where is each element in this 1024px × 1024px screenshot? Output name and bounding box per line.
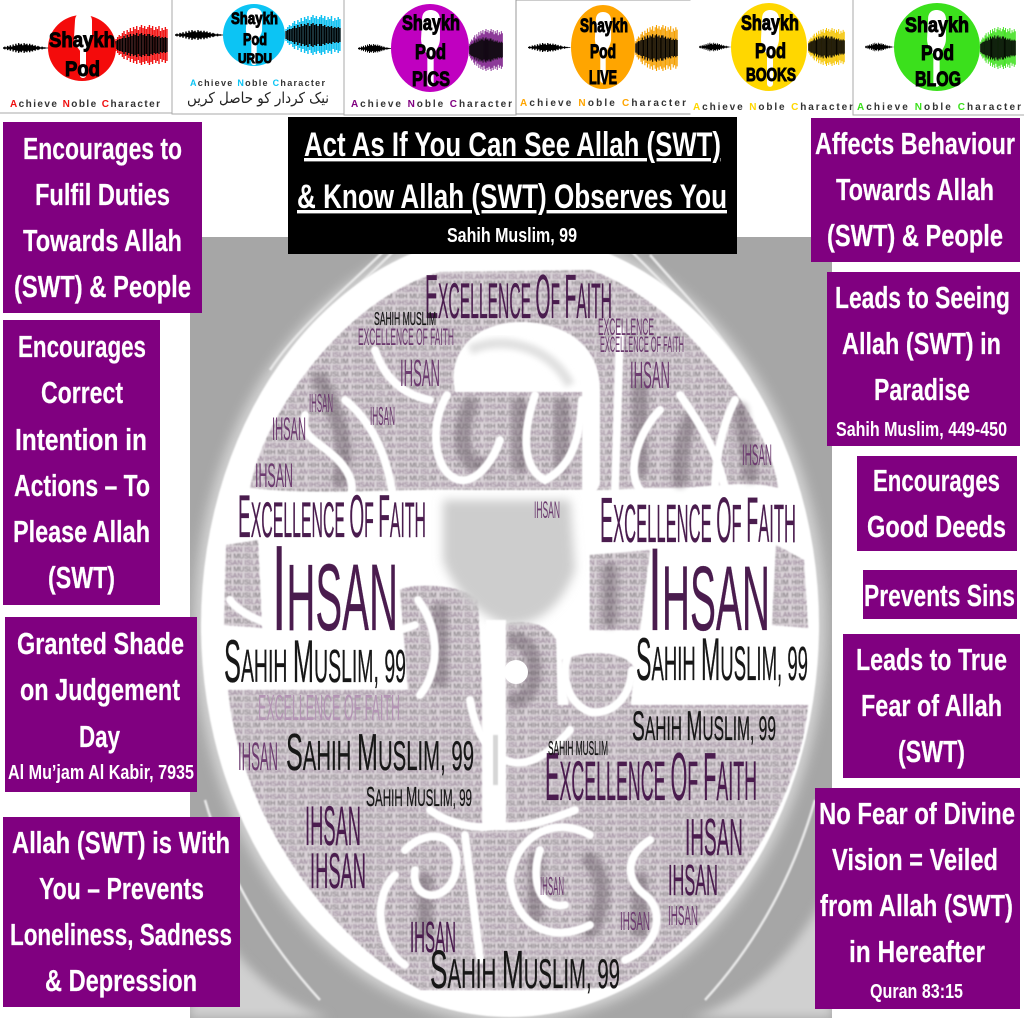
words: Sahih Muslim, 99: SAHIH MUSLIM bbox=[548, 738, 608, 760]
panel: fulfil duties: Towards Allah bbox=[23, 223, 182, 258]
words: Ihsan: IHSAN bbox=[272, 520, 398, 656]
logo tile: Shaykh Pod Urdu: Shaykh bbox=[231, 9, 278, 28]
panel: granted shade: Day bbox=[79, 719, 121, 754]
panel: no fear of divine vision bbox=[815, 788, 1020, 1009]
logo tile: Shaykh Pod Blog: BLOG bbox=[915, 68, 961, 91]
logo tile: Shaykh Pod Live: LIVE bbox=[589, 68, 617, 89]
panel: true fear bbox=[843, 634, 1020, 778]
words: Ihsan: IHSAN bbox=[685, 809, 743, 867]
logo tile: Shaykh Pod Books: Achieve Noble Character bbox=[693, 102, 853, 113]
logo tile: Shaykh Pod Pics: Achieve Noble Character bbox=[351, 99, 512, 110]
words: Ihsan: IHSAN bbox=[668, 900, 698, 931]
panel: true fear: (SWT) bbox=[898, 734, 965, 769]
words: Ihsan: IHSAN bbox=[630, 355, 670, 397]
central word cloud image bbox=[190, 227, 832, 1023]
panel: allah is with you: & Depression bbox=[45, 963, 197, 998]
white letter outlines bbox=[230, 330, 735, 965]
words: Ihsan: IHSAN bbox=[255, 457, 293, 495]
logo tile: Shaykh Pod Books: Pod bbox=[755, 40, 786, 63]
panel: correct intention: Encourages bbox=[18, 329, 146, 364]
words: Excellence of Faith: EXCELLENCE bbox=[598, 314, 654, 341]
panel: no fear of divine vision: Quran 83:15 bbox=[870, 981, 963, 1003]
words: Sahih Muslim, 99: SAHIH MUSLIM, 99 bbox=[286, 724, 474, 782]
panel: title: Sahih Muslim, 99 bbox=[447, 225, 577, 247]
logo strip bbox=[0, 0, 1024, 115]
words: Ihsan: IHSAN bbox=[310, 843, 366, 899]
panel: granted shade bbox=[5, 617, 197, 792]
white microphone bbox=[443, 322, 600, 825]
panel: granted shade: Al Mu’jam Al Kabir, 7935 bbox=[8, 762, 194, 784]
panel: fulfil duties bbox=[3, 122, 202, 313]
logo tile: Shaykh Pod red: Achieve Noble Character bbox=[10, 99, 160, 110]
words: Sahih Muslim, 99: SAHIH MUSLIM, 99 bbox=[636, 626, 808, 693]
panel: correct intention: (SWT) bbox=[48, 560, 115, 595]
panel: granted shade: on Judgement bbox=[20, 672, 180, 707]
panel: seeing allah in paradise bbox=[827, 272, 1020, 446]
panel: allah is with you: Loneliness, Sadness bbox=[10, 917, 232, 952]
panel: good deeds bbox=[857, 456, 1017, 551]
panel: granted shade: Granted Shade bbox=[17, 626, 184, 661]
panel: correct intention bbox=[3, 320, 160, 605]
logo tile: Shaykh Pod Blog: Shaykh bbox=[905, 14, 969, 37]
words: Excellence of Faith: EXCELLENCE OF FAITH bbox=[258, 687, 400, 728]
panel: fulfil duties: (SWT) & People bbox=[14, 269, 191, 304]
central word cloud image: IHSAN bbox=[648, 524, 770, 656]
words: Ihsan: IHSAN bbox=[400, 353, 440, 395]
words: Ihsan: IHSAN bbox=[370, 401, 395, 431]
panel: title: Act As If You Can See Allah (SWT) bbox=[304, 126, 721, 164]
words: Ihsan: IHSAN bbox=[668, 856, 718, 905]
panel: correct intention: Intention in bbox=[15, 422, 147, 457]
words: Excellence of Faith bbox=[238, 263, 796, 815]
logo tile: Shaykh Pod Pics: Shaykh bbox=[402, 12, 460, 35]
words: Ihsan: IHSAN bbox=[540, 871, 564, 901]
words: Ihsan: IHSAN bbox=[534, 497, 560, 524]
logo tile: Shaykh Pod Live bbox=[516, 0, 691, 114]
logo tile: Shaykh Pod Books: Shaykh bbox=[741, 12, 799, 35]
words: Excellence of Faith: EXCELLENCE OF FAITH bbox=[600, 484, 796, 556]
words: Excellence of Faith: EXCELLENCE OF FAITH bbox=[600, 332, 684, 357]
panel: fulfil duties: Fulfil Duties bbox=[35, 177, 170, 212]
words: Excellence of Faith: EXCELLENCE OF FAITH bbox=[425, 263, 612, 332]
panel: prevents sins bbox=[863, 570, 1017, 619]
logo tile: Shaykh Pod Blog: Achieve Noble Character bbox=[857, 102, 1021, 113]
panel: allah is with you: Allah (SWT) is With bbox=[12, 825, 230, 860]
dark blotches in letter bodies bbox=[320, 380, 750, 930]
panel: title: & Know Allah (SWT) Observes You bbox=[297, 178, 727, 216]
panel: no fear of divine vision: in Hereafter bbox=[849, 934, 985, 969]
logo tile: Shaykh Pod Urdu: Achieve Noble Character bbox=[190, 78, 325, 88]
words: Ihsan: IHSAN bbox=[410, 913, 456, 962]
logo tile: Shaykh Pod Urdu: Pod bbox=[243, 30, 267, 49]
words: Ihsan: IHSAN bbox=[238, 735, 278, 779]
words: Sahih Muslim, 99 bbox=[224, 309, 808, 1000]
logo tile: Shaykh Pod red: Pod bbox=[65, 58, 100, 81]
logo tile: Shaykh Pod Pics bbox=[344, 0, 516, 115]
words: Sahih Muslim, 99: SAHIH MUSLIM bbox=[374, 309, 436, 329]
logo tile: Shaykh Pod red bbox=[0, 0, 172, 113]
logo tile: Shaykh Pod Books: BOOKS bbox=[746, 65, 796, 85]
words: Excellence of Faith: EXCELLENCE OF FAITH bbox=[545, 739, 757, 815]
logo tile: Shaykh Pod Blog: Pod bbox=[921, 42, 954, 65]
panel: seeing allah in paradise: Paradise bbox=[874, 372, 970, 407]
words: Ihsan bbox=[238, 353, 772, 962]
words: Ihsan: IHSAN bbox=[309, 388, 333, 418]
panel: title bbox=[288, 117, 737, 254]
words: Sahih Muslim, 99: SAHIH MUSLIM, 99 bbox=[632, 702, 776, 749]
logo tile: Shaykh Pod Urdu: URDU bbox=[238, 50, 272, 66]
panel: affects behaviour bbox=[811, 118, 1020, 262]
logo tile: Shaykh Pod Pics: PICS bbox=[412, 68, 450, 91]
words: Excellence of Faith: EXCELLENCE OF FAITH bbox=[358, 324, 454, 351]
logo tile: Shaykh Pod Pics: Pod bbox=[415, 41, 446, 64]
words: Sahih Muslim, 99: SAHIH MUSLIM, 99 bbox=[430, 940, 620, 1000]
panel: correct intention: Actions – To bbox=[14, 468, 150, 503]
logo tile: Shaykh Pod red: Shaykh bbox=[49, 29, 115, 52]
logo tile: Shaykh Pod Blog bbox=[853, 0, 1024, 115]
panel: fulfil duties: Encourages to bbox=[23, 131, 182, 166]
panel: allah is with you: You – Prevents bbox=[39, 871, 204, 906]
panel: correct intention: Please Allah bbox=[13, 514, 150, 549]
letter shapes: Shaykh Pod Pics bbox=[224, 270, 808, 990]
words: Excellence of Faith: EXCELLENCE OF FAITH bbox=[238, 483, 426, 550]
logo tile: Shaykh Pod Books bbox=[691, 0, 853, 114]
words: Ihsan: IHSAN bbox=[620, 906, 650, 936]
words: Ihsan: IHSAN bbox=[305, 794, 361, 857]
panel: allah is with you bbox=[3, 817, 240, 1007]
logo tile: Shaykh Pod Urdu bbox=[172, 0, 344, 114]
words: Sahih Muslim, 99: SAHIH MUSLIM, 99 bbox=[224, 628, 406, 695]
logo tile: Shaykh Pod Urdu: نیک کردار کو حاصل کریں bbox=[187, 89, 329, 107]
words: Ihsan: IHSAN bbox=[272, 411, 306, 447]
panel: correct intention: Correct bbox=[41, 375, 123, 410]
words: Sahih Muslim, 99: SAHIH MUSLIM, 99 bbox=[366, 781, 472, 812]
logo tile: Shaykh Pod Live: Shaykh bbox=[580, 16, 628, 37]
logo tile: Shaykh Pod Live: Pod bbox=[590, 42, 616, 63]
logo tile: Shaykh Pod Live: Achieve Noble Character bbox=[520, 98, 686, 109]
central word cloud image: IHSAN bbox=[742, 439, 772, 472]
